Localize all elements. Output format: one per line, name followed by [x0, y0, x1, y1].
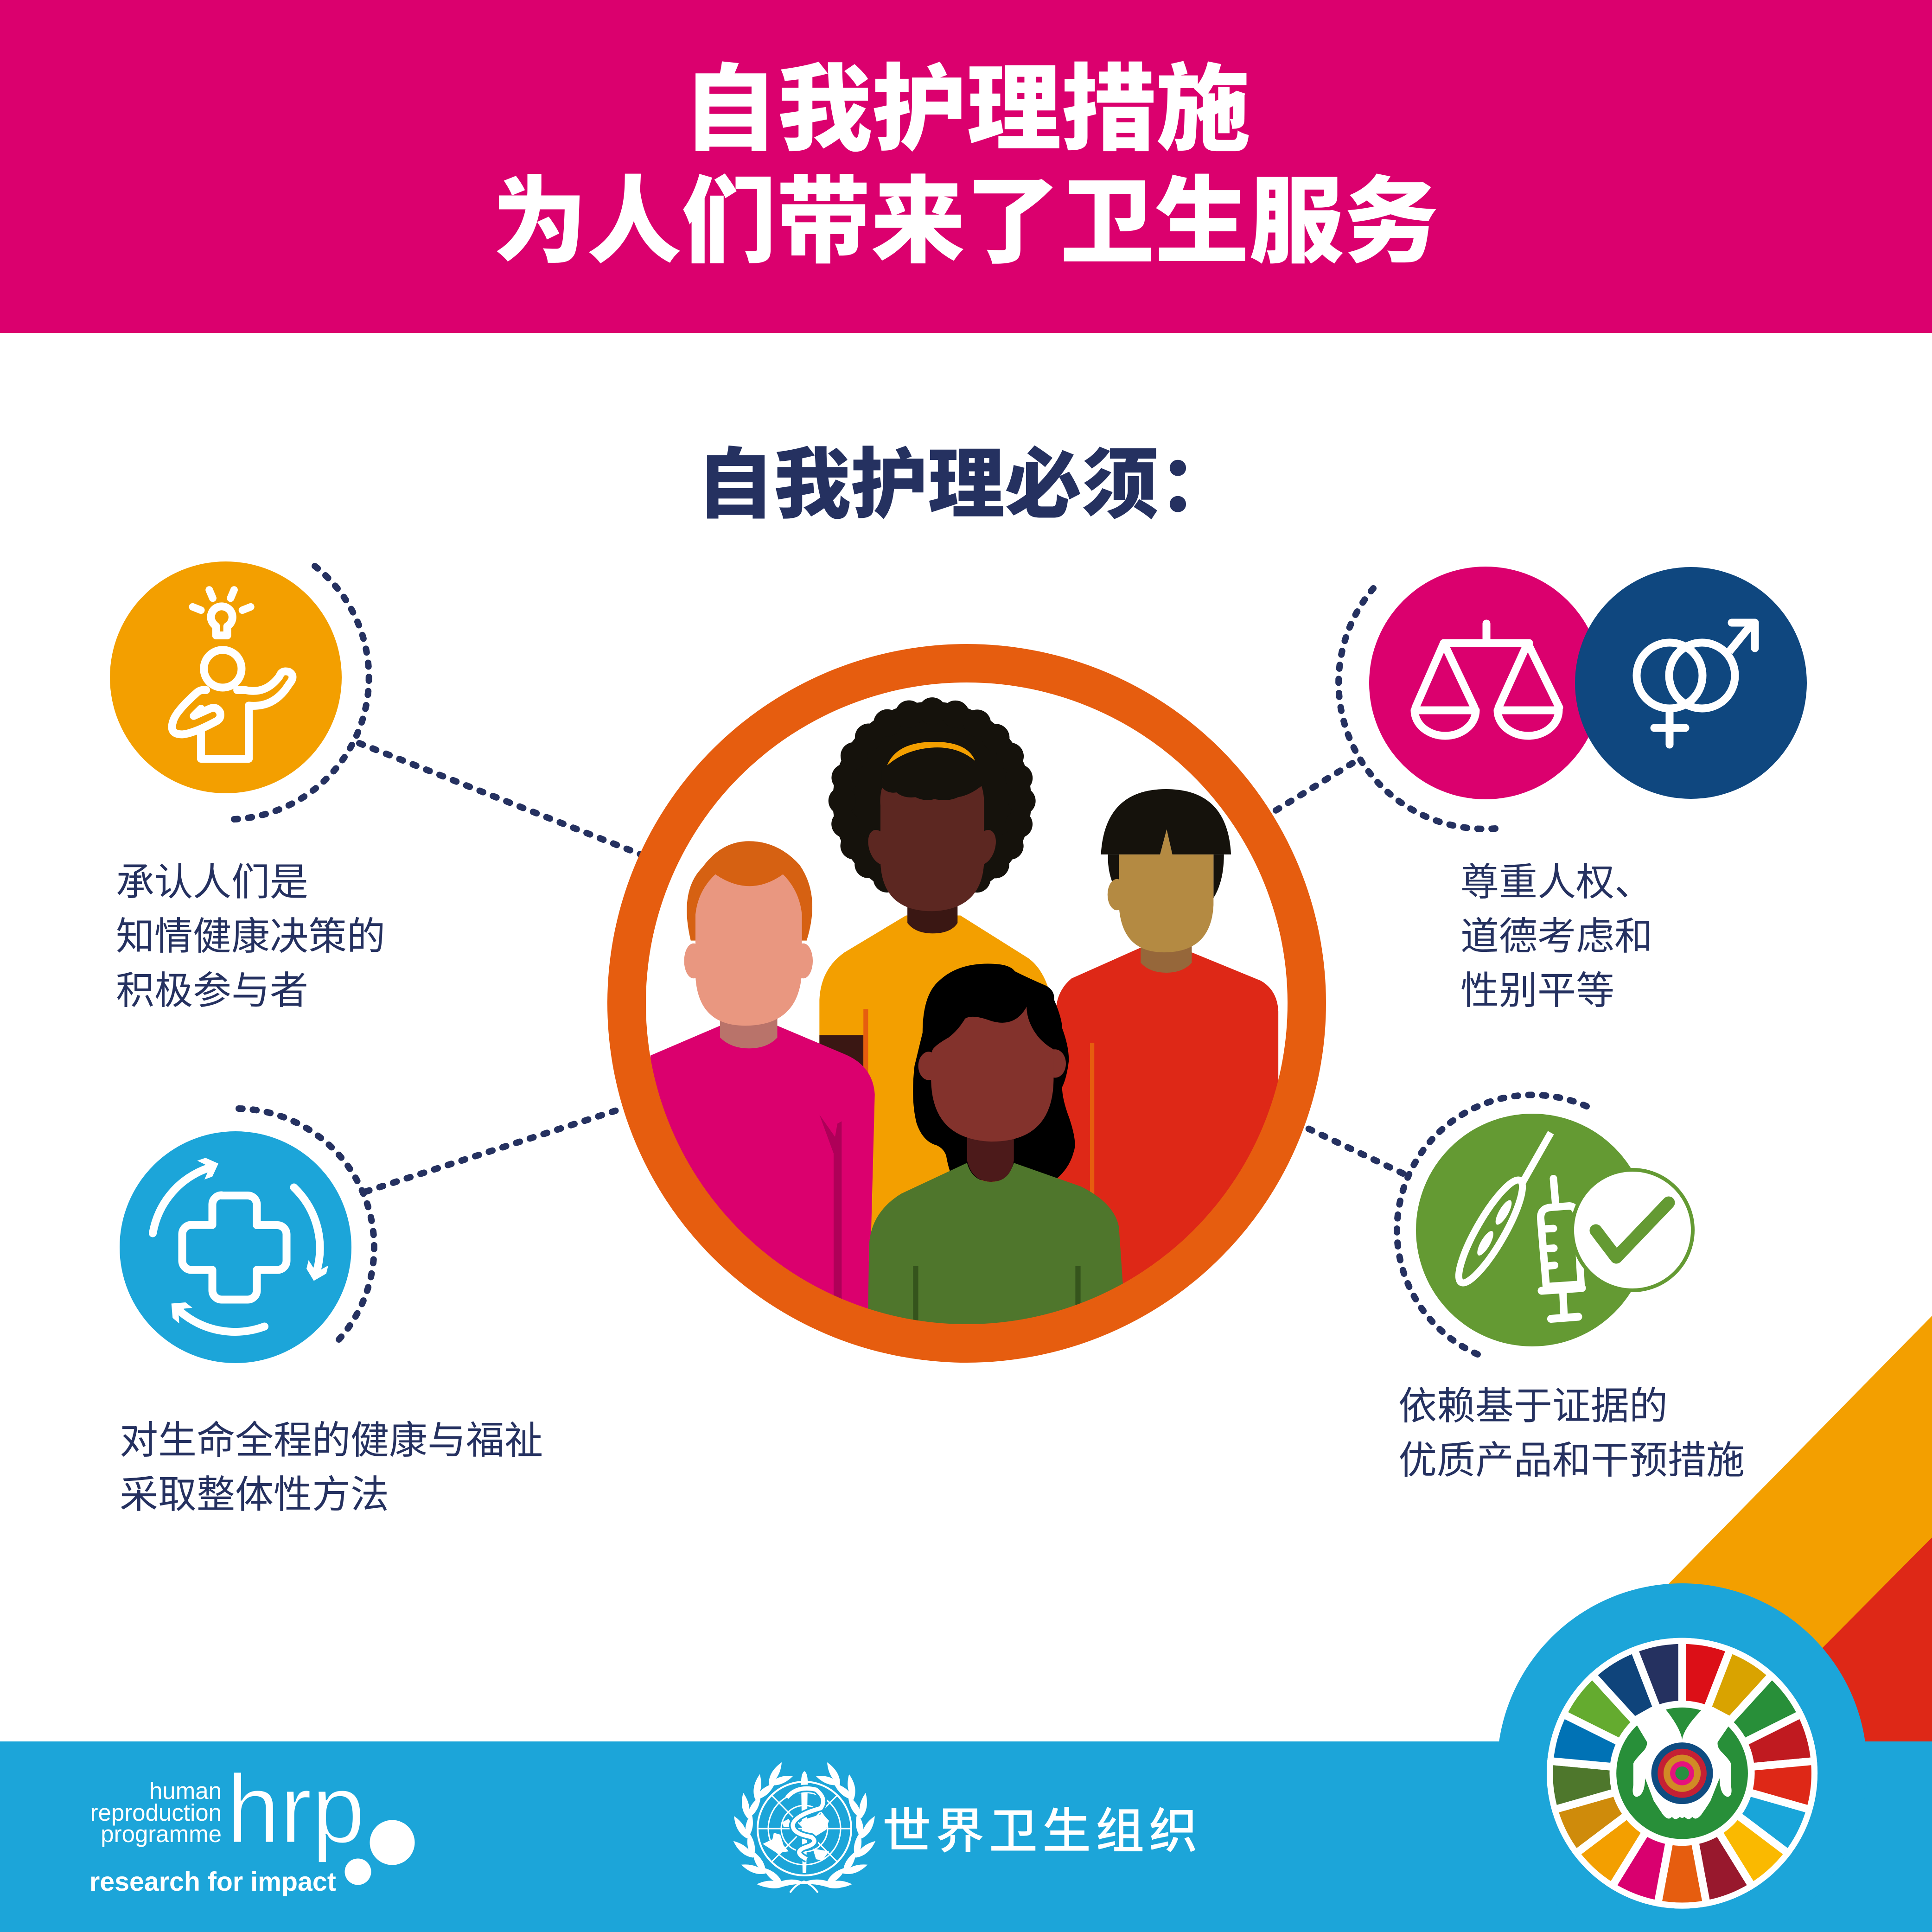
- logo: HRP: human: [149, 1778, 222, 1804]
- text: human rights: 道德考虑和: [1460, 915, 1653, 958]
- text: evidence-based products: 优质产品和干预措施: [1398, 1439, 1745, 1482]
- central illustration: four people in orange ring: [627, 663, 1307, 1364]
- panel: holistic approach: [120, 1109, 543, 1516]
- logo: World Health Organization emblem: [731, 1760, 878, 1893]
- subheading: 自我护理必须：: [697, 442, 1236, 528]
- text: evidence-based products: [1398, 1384, 1745, 1482]
- panel: informed participants: [110, 561, 385, 1012]
- icon: scales of justice: [1339, 567, 1602, 829]
- text: informed participants: 积极参与者: [116, 969, 308, 1012]
- text: holistic approach: 采取整体性方法: [120, 1473, 389, 1516]
- person: man with magenta shirt: [650, 841, 875, 1345]
- connector lines: [359, 743, 1403, 1192]
- diagonal ribbons: yellow and red: [1664, 1316, 1932, 1753]
- logo: HRP: research for impact: [89, 1867, 336, 1897]
- icon: person with light bulb: [110, 561, 369, 819]
- text: holistic approach: [120, 1419, 543, 1516]
- text: human rights: [1460, 861, 1653, 1012]
- logo: HRP: [89, 1754, 414, 1897]
- text: evidence-based products: 依赖基于证据的: [1398, 1384, 1668, 1428]
- text: holistic approach: 对生命全程的健康与福祉: [120, 1419, 543, 1462]
- icon: swab, syringe and check mark: [1397, 1095, 1693, 1354]
- bottom bar: [0, 1741, 1932, 1932]
- title: 自我护理措施: [683, 57, 1250, 163]
- icon: gender symbols: [1575, 567, 1807, 799]
- person: man with red shirt: [1056, 789, 1278, 1336]
- icon: self-care SDG wheel: [1541, 1632, 1823, 1913]
- logo: HRP: hrp: [227, 1754, 365, 1863]
- header banner: [0, 0, 1932, 333]
- text: World Health Organization: 世界卫生组织: [882, 1804, 1202, 1859]
- blue arch behind SDG wheel: [1497, 1583, 1867, 1932]
- logo: HRP: programme: [101, 1821, 222, 1847]
- panel: evidence-based products: [1397, 1095, 1745, 1482]
- person: woman with afro and yellow shirt: [819, 697, 1048, 1232]
- title: 为人们带来了卫生服务: [492, 169, 1438, 275]
- text: informed participants: 承认人们是: [116, 861, 308, 904]
- logo: HRP: reproduction: [90, 1799, 222, 1826]
- text: informed participants: 知情健康决策的: [116, 915, 385, 958]
- person: woman with green shirt: [868, 963, 1123, 1324]
- title: [492, 57, 1438, 275]
- icon: health cross with cycle arrows: [120, 1109, 374, 1363]
- text: human rights: 性别平等: [1460, 969, 1614, 1012]
- panel: human rights, ethics, gender equality: [1339, 567, 1807, 1012]
- text: human rights: 尊重人权、: [1460, 861, 1653, 904]
- text: informed participants: [116, 861, 385, 1012]
- orange ring: [627, 663, 1307, 1344]
